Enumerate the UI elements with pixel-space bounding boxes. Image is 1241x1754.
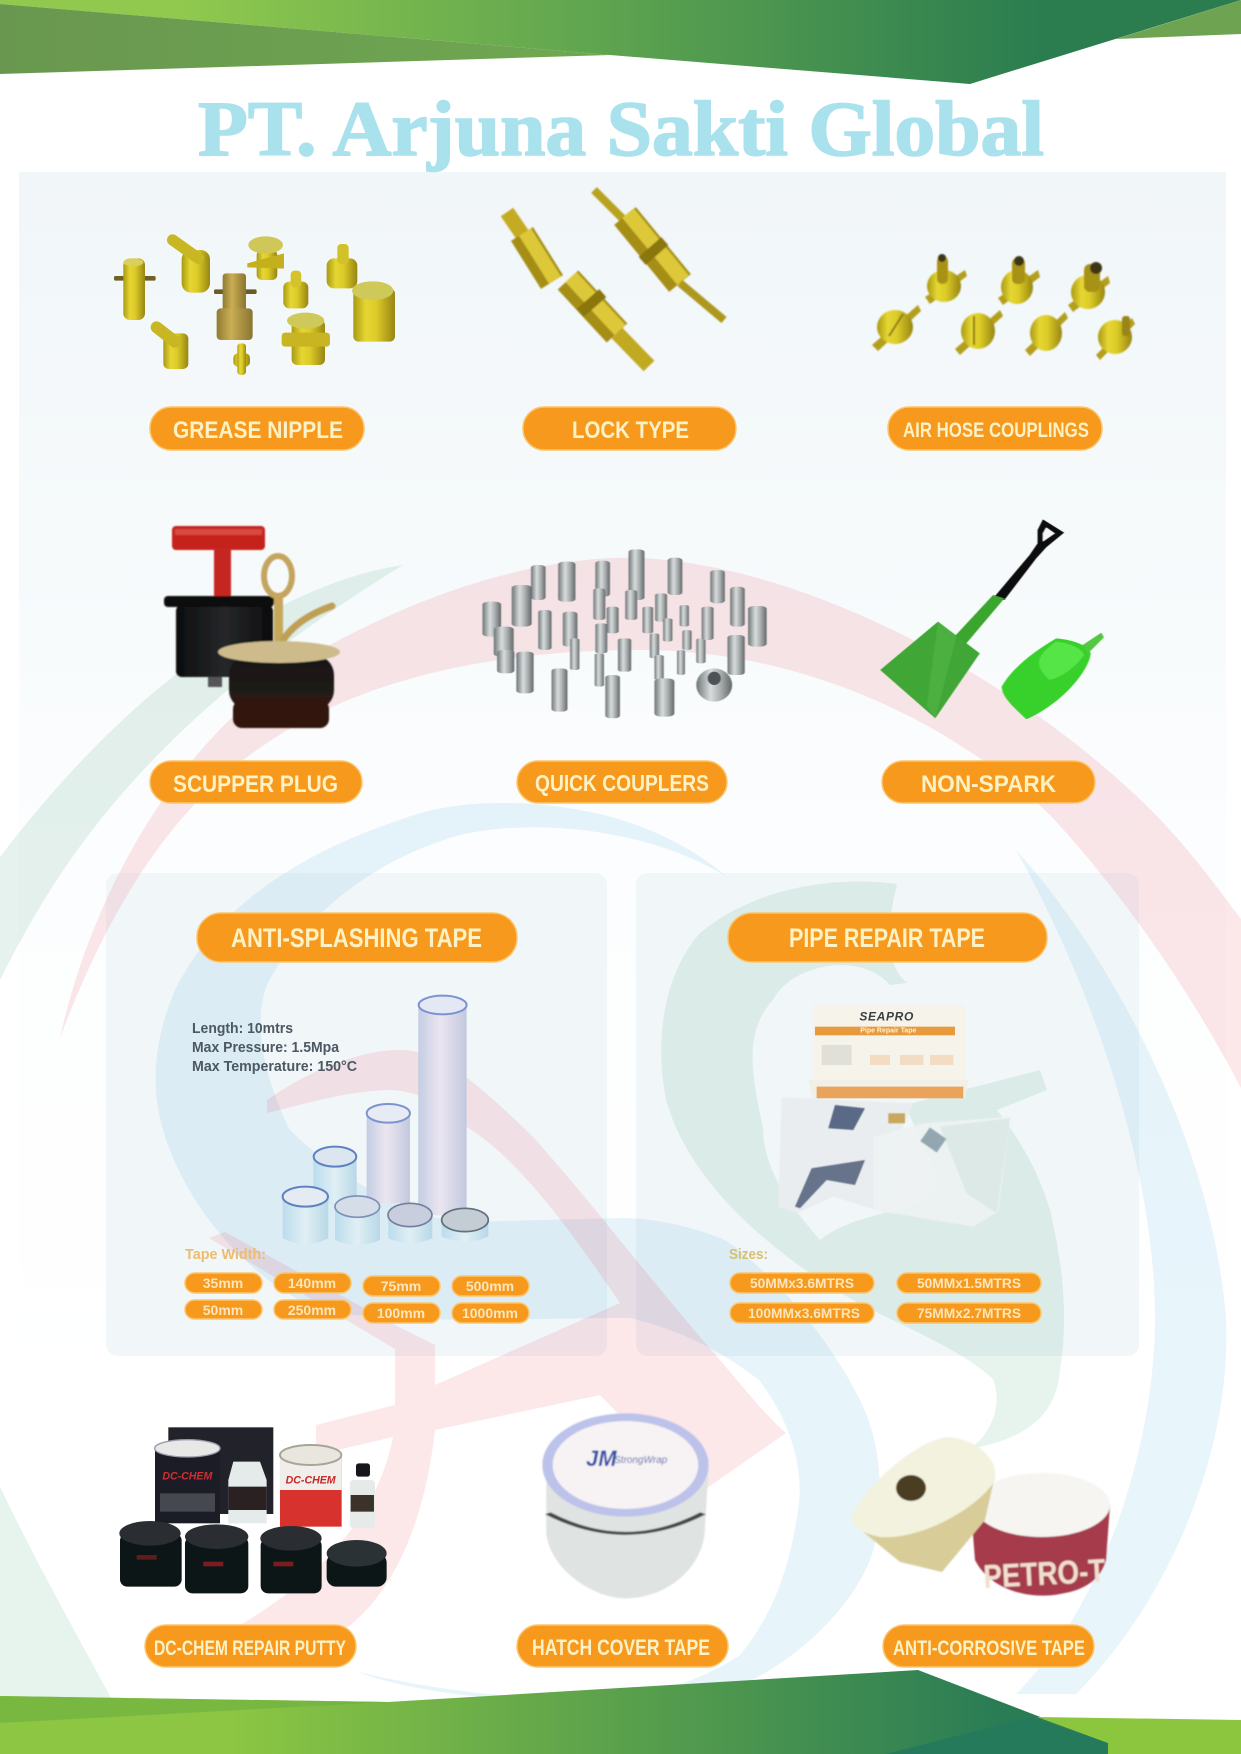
anti-splashing tape specifications: Length: 10mtrs (192, 1021, 293, 1037)
label: lock type (523, 407, 736, 450)
label: dc-chem repair putty: DC-CHEM REPAIR PUTTY (154, 1637, 346, 1660)
tape width options: 35mm (203, 1275, 243, 1291)
heading: pipe repair tape: PIPE REPAIR TAPE (789, 923, 985, 953)
product: scupper plug (164, 526, 340, 728)
label: hatch cover tape (517, 1625, 728, 1667)
product: dc-chem repair putty: DC-CHEM (162, 1470, 213, 1482)
product: hatch cover tape: JM (586, 1446, 617, 1471)
tape width options: 75mm (381, 1278, 421, 1294)
product: pipe repair tape kit (778, 1006, 1010, 1227)
pipe repair tape sizes: 100MMx3.6MTRS (748, 1305, 860, 1321)
product: non-spark shovel and scoop (880, 519, 1104, 719)
label: non-spark: NON-SPARK (921, 771, 1057, 798)
tape width options: 250mm (288, 1302, 336, 1318)
bottom banner (0, 1670, 1241, 1754)
tape width options: 500mm (466, 1278, 514, 1294)
product: dc-chem repair putty (119, 1427, 387, 1593)
heading: anti-splashing tape: ANTI-SPLASHING TAPE (231, 923, 482, 953)
product: hatch cover tape (542, 1413, 709, 1598)
tape width options (185, 1273, 529, 1323)
label: lock type: LOCK TYPE (572, 417, 689, 444)
label: non-spark (882, 761, 1095, 803)
label: grease nipple (150, 407, 364, 450)
product: dc-chem repair putty: DC-CHEM (286, 1474, 336, 1486)
tape width options: 50mm (203, 1302, 243, 1318)
product: air hose couplings (872, 254, 1135, 360)
label: scupper plug (150, 761, 362, 803)
title: PT. Arjuna Sakti Global (198, 85, 1044, 172)
product: pipe repair tape kit: SEAPRO (859, 1010, 914, 1024)
anti-splashing tape specifications: Max Temperature: 150°C (192, 1059, 358, 1075)
heading: anti-splashing tape (197, 913, 517, 962)
product: grease nipple (114, 236, 395, 375)
label: scupper plug: SCUPPER PLUG (173, 771, 338, 798)
panel: anti-splashing tape background (106, 873, 607, 1356)
product: pipe repair tape kit: Pipe Repair Tape (860, 1028, 916, 1035)
pipe repair tape sizes: 50MMx3.6MTRS (750, 1275, 854, 1291)
label: air hose couplings (888, 407, 1102, 450)
product: hatch cover tape: StrongWrap (614, 1455, 668, 1466)
pipe repair tape sizes: 75MMx2.7MTRS (917, 1305, 1021, 1321)
label: anti-corrosive tape (883, 1625, 1094, 1667)
product: anti-splashing tape rolls (283, 996, 488, 1245)
tape width options: 140mm (288, 1275, 336, 1291)
background panel (19, 172, 1226, 1390)
watermark logo (0, 558, 1241, 1702)
pipe repair tape sizes: 50MMx1.5MTRS (917, 1275, 1021, 1291)
label: quick couplers: QUICK COUPLERS (535, 770, 709, 796)
anti-splashing tape specifications (192, 1021, 358, 1075)
label: hatch cover tape: HATCH COVER TAPE (532, 1635, 710, 1660)
label: air hose couplings: AIR HOSE COUPLINGS (903, 419, 1089, 442)
tape width options: 100mm (377, 1305, 425, 1321)
top banner (0, 0, 1241, 84)
pipe repair tape sizes (730, 1273, 1041, 1323)
label: quick couplers (517, 761, 727, 803)
label: grease nipple: GREASE NIPPLE (173, 417, 343, 444)
panel: pipe repair tape background (636, 873, 1139, 1356)
label: anti-corrosive tape: ANTI-CORROSIVE TAPE (893, 1637, 1085, 1660)
product: lock type (507, 190, 724, 366)
tape width label: Tape Width: (185, 1246, 266, 1263)
sizes label: Sizes: (729, 1246, 768, 1263)
label: dc-chem repair putty (145, 1625, 356, 1667)
product: anti-corrosive tape (851, 1437, 1110, 1596)
product: quick couplers (482, 549, 767, 718)
tape width options: 1000mm (462, 1305, 518, 1321)
heading: pipe repair tape (728, 913, 1047, 962)
product: anti-corrosive tape: PETRO-T (982, 1552, 1106, 1595)
anti-splashing tape specifications: Max Pressure: 1.5Mpa (192, 1040, 340, 1056)
